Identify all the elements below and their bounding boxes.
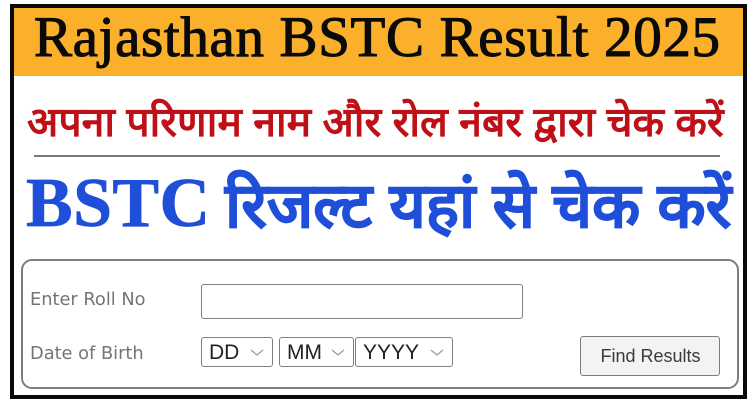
- select: year: YYYY: [363, 341, 419, 364]
- select: month: [279, 337, 354, 367]
- find results button: [580, 336, 720, 376]
- form panel: [21, 259, 739, 389]
- blue headline: Hindi words: रिजल्ट यहां से चेक करें: [225, 171, 731, 241]
- label: roll number: Enter Roll No: [30, 289, 146, 310]
- find results button: Find Results: [600, 346, 701, 366]
- select: day: [201, 337, 273, 367]
- select: day: DD: [209, 341, 239, 364]
- label: date of birth: Date of Birth: [30, 343, 144, 364]
- title banner: [14, 8, 743, 76]
- blue headline: [26, 165, 734, 242]
- blue headline: BSTC: BSTC: [26, 165, 210, 242]
- select: month: MM: [287, 341, 322, 364]
- roll number input: [201, 284, 523, 319]
- red Hindi subtitle: अपना परिणाम नाम और रोल नंबर द्वारा चेक करें: [27, 99, 724, 145]
- select: year: [355, 337, 453, 367]
- divider: [34, 155, 720, 157]
- title: Rajasthan BSTC Result 2025: [34, 6, 721, 69]
